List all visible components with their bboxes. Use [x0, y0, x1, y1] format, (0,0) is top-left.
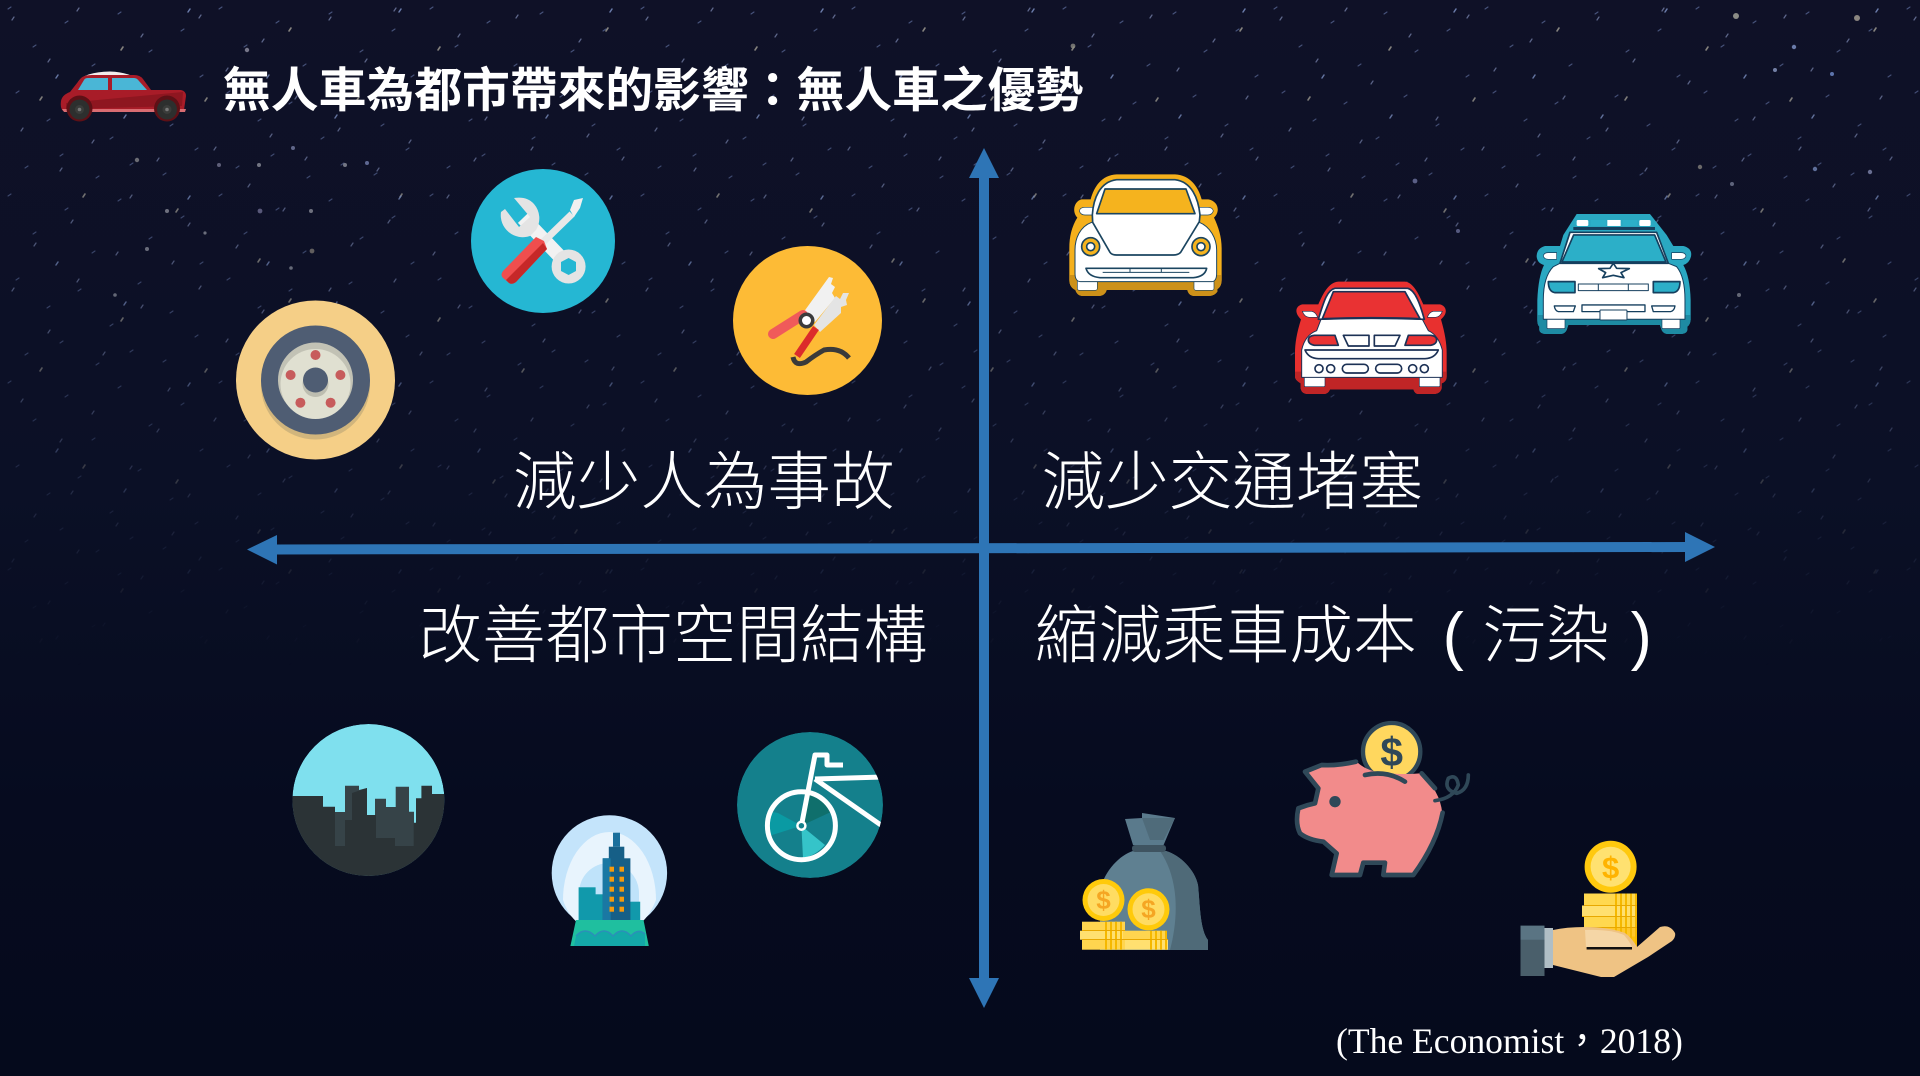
icon: wrench and screwdriver: [471, 169, 615, 313]
icon: red car next to title: [61, 72, 186, 122]
icon: piggy bank: $: [1380, 729, 1403, 775]
icon: police car: [1537, 214, 1691, 334]
icon: yellow car: [1069, 174, 1222, 296]
source citation: (The Economist，2018): [1336, 1013, 1683, 1064]
label: reduce ride cost and pollution: 縮減乘車成本: [1035, 600, 1417, 672]
icon: money bag with coins: $: [1141, 894, 1156, 924]
icon: money bag with coins: [1080, 813, 1208, 950]
label: reduce ride cost and pollution: 污染: [1482, 600, 1610, 672]
icon: red car: [1295, 282, 1447, 394]
icon: city skyline: [290, 724, 446, 880]
arrow: vertical axis: [969, 148, 999, 1008]
icon: money bag with coins: $: [1096, 885, 1111, 915]
icon: tyre: [236, 300, 395, 460]
icon: jumper clamp: [733, 246, 882, 395]
background: starry night sky: [8, 6, 1918, 614]
label: reduce ride cost and pollution: ): [1613, 600, 1652, 672]
label: reduce human error: 減少人為事故: [513, 447, 895, 518]
label: improve urban spatial structure: 改善都市空間結構: [418, 600, 927, 672]
label: reduce ride cost and pollution: (: [1425, 600, 1464, 672]
icon: hand holding coins: $: [1602, 850, 1619, 885]
title: 無人車為都市帶來的影響：無人車之優勢: [223, 52, 1084, 121]
label: reduce congestion: 減少交通堵塞: [1042, 447, 1423, 518]
icon: city snow globe: [552, 815, 667, 946]
arrow: horizontal axis: [247, 532, 1715, 564]
icon: bicycle: [737, 732, 888, 878]
icon: piggy bank: [1297, 723, 1468, 875]
icon: hand holding coins: [1520, 841, 1675, 977]
